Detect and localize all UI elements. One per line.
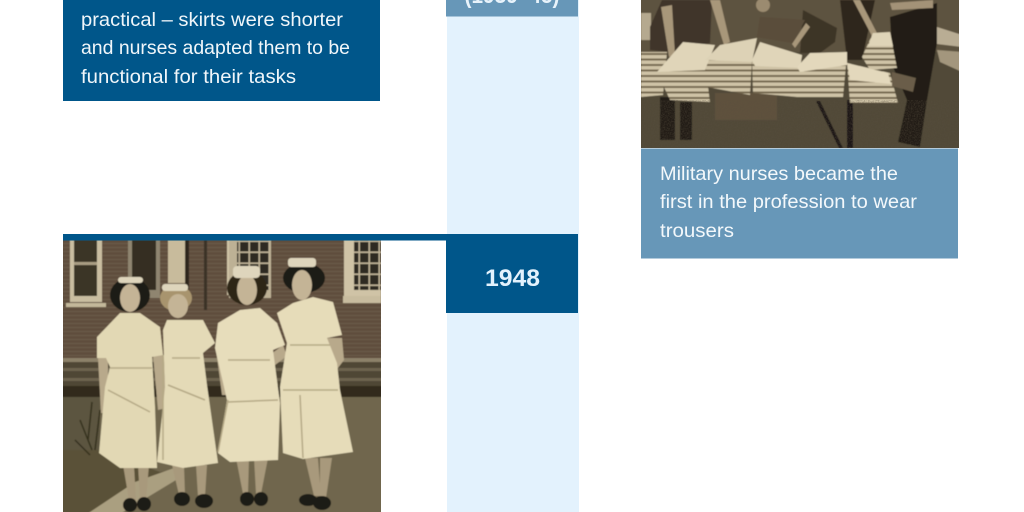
brick building	[63, 240, 381, 359]
stacks of linen	[862, 32, 897, 70]
figure: right nurse	[890, 3, 937, 147]
panel: military nurses caption: Military nurses became the	[660, 163, 898, 185]
nurse hair	[110, 263, 325, 312]
photo: four nurses in uniform, 1948	[55, 232, 390, 512]
panel: practical uniforms caption	[63, 0, 380, 101]
nurse dresses	[97, 313, 163, 468]
twig shrub	[75, 402, 100, 455]
year marker: 1948: 1948	[485, 265, 540, 292]
table legs and crate	[715, 93, 777, 120]
nurse caps	[118, 258, 316, 291]
nurse faces	[120, 270, 312, 318]
panel: military nurses caption	[641, 148, 958, 258]
year tab: 1939–45	[446, 0, 578, 16]
panel: military nurses caption: trousers	[660, 220, 734, 242]
panel: practical uniforms caption: and nurses adapted them to be	[81, 37, 350, 59]
panel: practical uniforms caption: practical – skirts were shorter	[81, 9, 344, 31]
timeline column	[447, 0, 579, 512]
panel: practical uniforms caption: functional for their tasks	[81, 66, 296, 88]
figure: third nurse	[840, 0, 875, 60]
windows	[70, 240, 102, 302]
folder	[892, 72, 916, 92]
year marker: 1948	[63, 234, 578, 313]
photo: military nurses folding linen at a table	[641, 0, 959, 148]
nurse arms	[98, 338, 344, 413]
figure: centre nurses	[800, 10, 837, 53]
nurse legs and shoes	[123, 458, 332, 500]
panel: military nurses caption: first in the profession to wear	[660, 191, 918, 213]
figure: left nurse	[650, 0, 712, 52]
dress folds	[108, 345, 338, 460]
